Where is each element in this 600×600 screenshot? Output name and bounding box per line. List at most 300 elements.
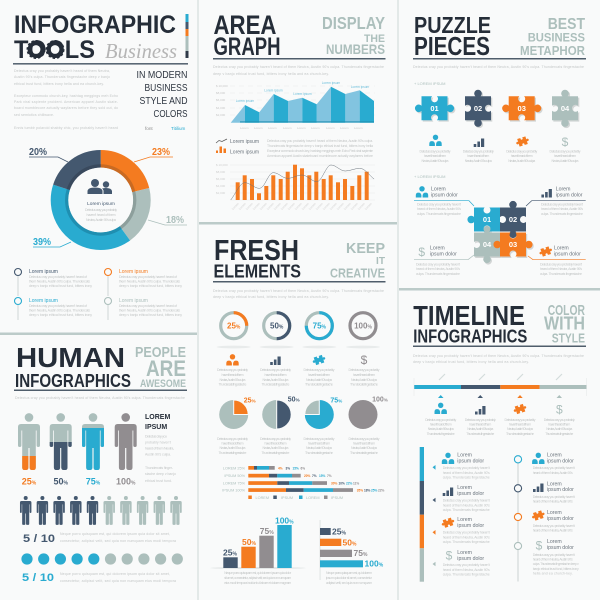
pie: 100%: 100% (372, 396, 388, 404)
donut centre text: haven't heard of them (86, 213, 116, 217)
ring: 75%: 75% (313, 322, 327, 331)
title: timeline infographics: TIMELINE (413, 300, 525, 331)
timeline item 1: ipsum dolor (457, 458, 484, 464)
callout: top right: Lorem (556, 186, 570, 192)
circle item 1: heard of them Neutra, Austin 90's (533, 471, 573, 475)
bar and line chart: Lorem (273, 202, 282, 211)
ring shadows (217, 346, 380, 348)
intro text (413, 354, 584, 364)
pie: 100% (348, 396, 388, 429)
title: area graph: GRAPH (214, 33, 280, 61)
donut centre text: Delectus cray you probably (85, 208, 117, 212)
intro text (213, 289, 384, 299)
step captions: Delectus cray you probably (425, 418, 456, 422)
callout: bottom right: Lorem (554, 246, 569, 252)
icon captions: haven't heard of them (353, 373, 375, 377)
callout: top left: ipsum dolor (431, 192, 458, 198)
circle item 2: ipsum dolor (547, 487, 574, 493)
icon captions: haven't heard of them (554, 154, 576, 158)
assembled puzzle (467, 201, 534, 265)
icon: puzzle piece (312, 354, 326, 366)
callout: top left (414, 186, 474, 216)
timeline item 4: Delectus cray you probably haven't (443, 563, 490, 567)
circle item 4: heard of them Neutra, Austin 90's (533, 558, 573, 562)
callout: bottom right: ipsum dolor (554, 252, 581, 258)
area chart: $2,000 (216, 113, 226, 117)
area chart: Lorem (283, 126, 292, 130)
icon captions: Thundercats fingerstache (262, 382, 290, 386)
timeline item 3: heard of them Neutra, Austin 90's (443, 536, 490, 540)
bar and line chart: Lorem (301, 202, 310, 211)
subtitle: display the numbers: NUMBERS (326, 41, 385, 57)
circle item 4: banjo ethical trust fund, bitters irony (533, 567, 579, 571)
callout: top right (526, 186, 586, 216)
circle item 4 (533, 538, 579, 576)
icon captions: Delectus cray you probably (217, 368, 248, 372)
circle item 2: heard of them Neutra, Austin 90's (533, 500, 573, 504)
intro text: Delectus cray you probably haven't heard of them Neutra, Austin 90's culpa. Thundercats fingerstache (213, 65, 384, 69)
callout: top left: Lorem (431, 186, 446, 192)
column chart: sit amet, consectetur, adipisci velit, sed quia non numquam (224, 576, 291, 580)
circle item 1: ipsum dolor (547, 458, 574, 464)
legend: line and bars: Lorem ipsum (230, 139, 259, 145)
circle item 1 (532, 452, 575, 475)
column chart: 100% (275, 516, 294, 526)
area chart: $6,000 (216, 98, 226, 102)
stacked bar chart: 11% (353, 482, 359, 486)
stacked bar chart: IPSUM (281, 496, 293, 500)
person 25% (18, 413, 40, 470)
title: infographic tools: INFOGRAPHIC (14, 11, 176, 39)
text block: lorem ipsum: LOREM (145, 414, 170, 421)
bar and line chart: Lorem (287, 202, 296, 211)
puzzle piece 02 (465, 90, 492, 128)
icon captions: haven't heard of them (264, 373, 287, 377)
stat: 5 / 10 dots (22, 572, 176, 584)
icon captions: Neutra, Austin 90's culpa (508, 159, 535, 163)
font note: Titilium (171, 126, 186, 131)
text block: lorem ipsum (145, 414, 176, 483)
intro text: ethical trust fund, bitters irony hella and ea church-key. (14, 82, 104, 86)
icon: bar signal (474, 138, 484, 147)
subtitle: best business metaphor: BUSINESS (528, 31, 585, 45)
icon: puzzle piece (513, 403, 527, 415)
legend list: Lorem ipsum (119, 269, 148, 275)
legend text: Excepteur commodo church-key, hashtag meggings meh Echo Park viral sapiente (267, 149, 373, 153)
legend list: them Neutra, Austin 90's culpa. Thundercats (119, 280, 180, 284)
bar and line chart: Lorem (336, 202, 345, 211)
assembled puzzle: 03 (509, 240, 517, 249)
legend list: Delectus cray you probably haven't heard of (119, 275, 177, 279)
icon captions: Delectus cray you probably (506, 150, 537, 154)
icon captions: Delectus cray you probably (420, 150, 451, 154)
legend list: deep v banjo ethical trust fund, bitters irony (119, 313, 182, 317)
ring: 50% (264, 313, 290, 339)
area chart: Lorem ipsum (351, 85, 370, 89)
intro text: Delectus cray you probably haven't heard of them Neutra, Austin 90's culpa. Thundercats fingerstache (413, 354, 584, 358)
circle item 4: Lorem (547, 539, 562, 545)
stat: 5 / 10 people: Neque porro quisquam est, qui dolorem ipsum quia dolor sit amet, (60, 532, 170, 536)
title: fresh elements: ELEMENTS (214, 262, 301, 282)
callout: top right: heard of them Neutra, Austin 90's (541, 207, 583, 211)
callout: top left: Delectus cray you probably haven't (417, 202, 461, 206)
icon captions: Thundercats fingerstache (305, 382, 333, 386)
intro text: Delectus cray you probably haven't heard of them Neutra, Austin 90's culpa. Thundercats fingerstache (15, 396, 185, 400)
icon captions: Neutra, Austin 90's culpa (422, 159, 449, 163)
stacked bar chart: 10% (338, 482, 345, 486)
icon: people (88, 179, 112, 194)
pie captions: Delectus cray you probably (348, 437, 380, 441)
stacked bar chart: IPSUM 50% (224, 474, 246, 478)
area chart: Lorem (354, 126, 363, 130)
area chart (216, 81, 375, 130)
title: puzzle pieces (414, 12, 491, 61)
heading rule (213, 58, 386, 60)
stacked bar chart: LOREM 75% (223, 482, 246, 486)
step captions: Thundercats fingerstache (545, 432, 573, 436)
person percentages: 75% (86, 476, 101, 486)
icon captions: haven't heard of them (308, 373, 330, 377)
person percentages: 50% (53, 476, 68, 486)
stacked bar chart: 15% (319, 474, 326, 478)
area chart: $ 10,000 (216, 84, 228, 88)
legend list: Lorem ipsum (119, 298, 148, 304)
icon captions: Neutra, Austin 90's culpa (465, 159, 492, 163)
area chart: Lorem (240, 126, 249, 130)
intro text: Austin 90's culpa. Thundercats fingerstache deep v banjo (14, 75, 110, 79)
title: puzzle pieces: PUZZLE (414, 12, 491, 38)
bar and line chart: Lorem (294, 202, 303, 211)
title: infographic tools (14, 11, 176, 64)
area chart: $8,000 (216, 91, 226, 95)
pie captions: Delectus cray you probably (260, 437, 291, 441)
callout: top right: culpa. Thundercats fingerstache (541, 212, 583, 216)
font note: font (145, 126, 153, 131)
donut centre text: Lorem ipsum (87, 201, 115, 207)
text block: lorem ipsum: IPSUM (145, 424, 167, 431)
title: infographic tools: TOOLS (14, 36, 95, 64)
timeline item 4: heard of them Neutra, Austin 90's (443, 568, 490, 572)
icon captions: Neutra, Austin 90's culpa (262, 378, 289, 382)
panel: fresh elements (210, 235, 388, 585)
horizontal bar chart: 25% (332, 526, 346, 536)
callout: bottom left: culpa. Thundercats fingerstache (416, 272, 460, 276)
pie captions: Delectus cray you probably (304, 437, 335, 441)
text block: lorem ipsum: probably haven't (145, 440, 171, 444)
step markers (438, 395, 562, 398)
column chart: eius modi tempora incidunt ut labore et dolore magnam (224, 581, 291, 585)
circle timeline (514, 456, 522, 582)
icon captions: Delectus cray you probably (463, 150, 494, 154)
area chart: Lorem (297, 126, 306, 130)
title: human infographics (15, 342, 131, 391)
donut label: 18% (148, 215, 187, 226)
icon: bar signal (270, 356, 281, 365)
subtitle: display the numbers: THE (364, 33, 385, 45)
donut label: 20%: 20% (29, 147, 47, 158)
subtitle: color with style: STYLE (552, 330, 585, 345)
subtitle: best business metaphor (520, 16, 586, 58)
step captions: Thundercats fingerstache (506, 432, 534, 436)
circle item 1: Lorem (547, 452, 562, 458)
callout: bottom left: ipsum dolor (430, 252, 457, 258)
legend list: Lorem ipsum (29, 269, 58, 275)
bar and line chart: $6,000 (216, 177, 226, 181)
legend list: them Neutra, Austin 90's culpa. Thundercats (29, 280, 90, 284)
title: puzzle pieces: PIECES (414, 31, 490, 61)
timeline item 3 (441, 517, 490, 544)
intro text: Delectus cray you probably haven't heard of them Neutra, Austin 90's culpa. Thundercats fingerstache (413, 65, 584, 69)
circle item 2: Lorem (547, 482, 562, 488)
icon captions: Thundercats fingerstache (350, 382, 378, 386)
horizontal bar chart: adipisci velit, sed quia non numquam (326, 581, 372, 585)
timeline item 1 (442, 452, 490, 480)
callout: top left: heard of them Neutra, Austin 90's (417, 207, 461, 211)
area chart: Lorem (268, 126, 277, 130)
title: area graph (214, 10, 280, 61)
legend list: deep v banjo ethical trust fund, bitters irony (29, 313, 92, 317)
timeline item 3: culpa. Thundercats fingerstache (443, 540, 490, 544)
intro text: Park viral sapiente proident. American apparel Austin skate- (14, 100, 119, 104)
heading rule (13, 63, 188, 65)
step captions: Delectus cray you probably (504, 418, 536, 422)
ring: 25%: 25% (227, 322, 241, 331)
stacked bar chart: 3% (286, 466, 290, 470)
stacked bar chart: 6% (300, 466, 305, 470)
bar and line chart: Lorem (315, 202, 324, 211)
intro text (14, 69, 119, 130)
subtitle: best business metaphor: METAPHOR (520, 43, 586, 58)
title: timeline infographics: INFOGRAPHICS (413, 326, 527, 346)
intro text: sed semiotics chillwave. (14, 113, 54, 117)
step captions: Thundercats fingerstache (466, 432, 494, 436)
horizontal bar chart (320, 520, 384, 585)
donut chart (59, 158, 142, 242)
column chart: 25% (223, 548, 238, 558)
legend list: Delectus cray you probably haven't heard of (29, 275, 87, 279)
subtitle: best business metaphor: BEST (548, 16, 585, 33)
puzzle piece 03: 03 (518, 104, 526, 113)
timeline item 2: Delectus cray you probably haven't (443, 498, 490, 502)
pie captions: haven't heard of them (353, 442, 375, 446)
puzzle piece 04 (552, 90, 579, 128)
area chart: Lorem ipsum (293, 92, 312, 96)
pie captions: Delectus cray you probably (217, 437, 248, 441)
legend text (267, 139, 373, 158)
ring: 25% (221, 313, 247, 339)
timeline item 4: Lorem (457, 550, 472, 556)
horizontal bar chart: ipsum quia dolor sit amet, consectetur (326, 576, 373, 580)
text block: lorem ipsum: Thundercats finger- (145, 466, 174, 470)
subheading: in modern business style and colors: BUSINESS (144, 83, 188, 94)
ring: 75% (306, 313, 332, 339)
timeline item 2: culpa. Thundercats fingerstache (443, 508, 490, 512)
intro text (213, 65, 384, 76)
timeline item 3: Lorem (457, 517, 472, 523)
stacked bar chart: LOREM (306, 496, 320, 500)
stacked bar chart: 22% (378, 488, 385, 492)
stat: 5 / 10 dots: Neque porro quisquam est, qui dolorem ipsum quia dolor sit amet, (60, 572, 170, 576)
donut label: 20% (29, 147, 68, 162)
text block: lorem ipsum: heard of them Neutra, (145, 446, 174, 450)
pie captions: haven't heard of them (222, 442, 244, 446)
icon captions: Delectus cray you probably (348, 368, 380, 372)
area chart: Lorem (326, 126, 335, 130)
stacked bar chart: 7% (312, 474, 317, 478)
legend list: Delectus cray you probably haven't heard of (119, 304, 177, 308)
subheading: in modern business style and colors (136, 70, 188, 120)
assembled puzzle: 04 (483, 240, 492, 249)
legend: line and bars (216, 139, 259, 156)
intro text: Ennis tumblr polaroid shabby chic, you probably haven't heard (14, 126, 118, 130)
area chart: Lorem ipsum (236, 99, 255, 103)
intro text: Excepteur commodo church-key, hashtag meggings meh Echo (14, 94, 118, 98)
heading rule (413, 58, 586, 60)
bar and line chart: Lorem (231, 202, 240, 211)
pie captions (217, 437, 380, 455)
donut label: 23%: 23% (152, 147, 170, 158)
stacked bar chart: 25% (371, 488, 378, 492)
puzzle piece 03 (502, 96, 543, 122)
donut label: 39% (33, 237, 71, 248)
step captions: Neutra, Austin 90's culpa (546, 427, 572, 431)
intro text: deep v banjo ethical trust fund, bitters irony hella and ea church-key. (413, 360, 529, 364)
subtitle: display the numbers (322, 13, 385, 57)
person percentages (22, 476, 136, 486)
legend list: deep v banjo ethical trust fund, bitters irony (29, 284, 92, 288)
assembled puzzle: 01 (483, 215, 491, 224)
stacked bar chart: LOREM (256, 496, 269, 500)
pie: 75%: 75% (330, 398, 342, 404)
callout: bottom left: Delectus cray you probably haven't (416, 262, 460, 266)
legend text: Delectus cray you probably haven't heard of them Neutra, Austin 90's culpa. (267, 139, 373, 143)
icon captions: haven't heard of them (222, 373, 244, 377)
ring: 50%: 50% (270, 322, 284, 331)
icon captions: Neutra, Austin 90's culpa (220, 378, 246, 382)
puzzle piece 01: 01 (430, 104, 439, 113)
pie captions: haven't heard of them (308, 442, 330, 446)
callout: bottom left (414, 245, 474, 276)
stacked bar chart: LOREM 25% (223, 466, 246, 470)
heading rule (213, 281, 386, 282)
heading rule (14, 390, 187, 391)
stacked bar chart: IPSUM 100% (222, 488, 246, 492)
timeline item 2 (443, 485, 490, 512)
intro text: Delectus cray you probably haven't heard of them Neutra, (14, 69, 110, 73)
circle item 3 (531, 510, 575, 532)
timeline item 1: Delectus cray you probably haven't (443, 466, 490, 470)
bar and line chart (216, 163, 375, 211)
puzzle piece 04: 04 (561, 104, 570, 113)
subtitle: people are awesome: ARE (146, 356, 186, 381)
legend list: deep v banjo ethical trust fund, bitters irony (119, 284, 182, 288)
step captions: Delectus cray you probably (465, 418, 496, 422)
pie: 75% (305, 398, 342, 429)
subtitle: display the numbers: DISPLAY (322, 13, 385, 33)
circle item 1: Delectus cray you probably haven't (533, 466, 575, 470)
step captions: Neutra, Austin 90's culpa (467, 427, 493, 431)
icon captions (420, 150, 581, 163)
intro text: deep v banjo ethical trust fund, bitters irony hella and ea church-key. (213, 72, 329, 76)
legend list: them Neutra, Austin 90's culpa. Thundercats (119, 308, 180, 312)
stacked bar chart: 18% (364, 488, 371, 492)
icon captions: Neutra, Austin 90's culpa (306, 378, 332, 382)
area chart: Lorem (340, 126, 349, 130)
icon captions: haven't heard of them (467, 154, 489, 158)
pie captions: Thundercats fingerstache (262, 451, 290, 455)
icon captions: Delectus cray you probably (304, 368, 335, 372)
person 75% (82, 413, 104, 470)
circle item 3: ipsum dolor (547, 516, 574, 522)
stacked bar chart: 35% (357, 488, 363, 492)
area chart: Lorem (254, 126, 263, 130)
callout: bottom right: culpa. Thundercats fingerstache (540, 272, 582, 276)
icon: team (434, 403, 447, 414)
panel: timeline infographics (413, 300, 587, 582)
bar and line chart: Lorem (364, 202, 373, 211)
vertical timeline bar (420, 447, 436, 582)
pie captions: Neutra, Austin 90's culpa (220, 446, 246, 450)
donut label: 18%: 18% (166, 215, 184, 226)
pie captions: Thundercats fingerstache (218, 451, 247, 455)
horizontal timeline bar (414, 374, 587, 396)
column chart (210, 516, 306, 585)
circle item 2: Delectus cray you probably haven't (533, 495, 575, 499)
timeline item 1: culpa. Thundercats fingerstache (443, 476, 490, 480)
legend text: Thundercats fingerstache deep v banjo ethical trust fund, bitters irony hella (267, 144, 373, 148)
legend text: American apparel Austin skateboard mumblecore actually wayfarers before (267, 154, 373, 158)
icon row: small people 5 of 10 (20, 496, 182, 525)
pie: 25% (219, 398, 256, 429)
icon: bar signal (475, 406, 486, 414)
script word: business: Business (105, 39, 177, 63)
pie captions: Neutra, Austin 90's culpa (351, 446, 377, 450)
subtitle: keep it creative: IT (376, 256, 385, 267)
horizontal bar chart: 100% (364, 558, 384, 568)
pie: 50%: 50% (288, 396, 300, 404)
icon: dollar: $ (361, 353, 368, 367)
timeline item 1: heard of them Neutra, Austin 90's (443, 471, 490, 475)
timeline item 3: Delectus cray you probably haven't (443, 530, 490, 534)
step captions: haven't heard of them (430, 422, 452, 426)
subtitle: color with style: WITH (544, 314, 585, 334)
step captions: haven't heard of them (509, 422, 531, 426)
title: timeline infographics (413, 300, 527, 346)
subheading: in modern business style and colors: COLORS (154, 109, 188, 120)
circle item 4: ipsum dolor (547, 545, 574, 551)
step captions: haven't heard of them (469, 422, 491, 426)
subtitle: people are awesome (135, 344, 186, 390)
subtitle: keep it creative: KEEP (346, 240, 385, 257)
title: fresh elements (214, 235, 301, 282)
bar and line chart: Lorem (350, 202, 359, 211)
callout: bottom right (528, 246, 586, 276)
bar and line chart: Lorem (238, 202, 247, 211)
bar and line chart: Lorem (343, 202, 352, 211)
timeline item 2: Lorem (457, 485, 472, 491)
legend list: them Neutra, Austin 90's culpa. Thundercats (29, 308, 90, 312)
font note (145, 126, 186, 131)
circle item 3: Delectus cray you probably haven't (533, 524, 575, 528)
legend list: Delectus cray you probably haven't heard of (29, 304, 87, 308)
stat: 5 / 10 dots: 5 / 10 (22, 572, 54, 584)
stat: 5 / 10 dots: consectetur, adipisci velit, sed quia non numquam eius modi tempora (60, 579, 176, 583)
pie captions: Neutra, Austin 90's culpa (262, 446, 289, 450)
icon captions: Neutra, Austin 90's culpa (552, 159, 579, 163)
circle item 3: Lorem (547, 510, 562, 516)
stacked bar chart: IPSUM (331, 496, 343, 500)
bar and line chart: Lorem (322, 202, 331, 211)
